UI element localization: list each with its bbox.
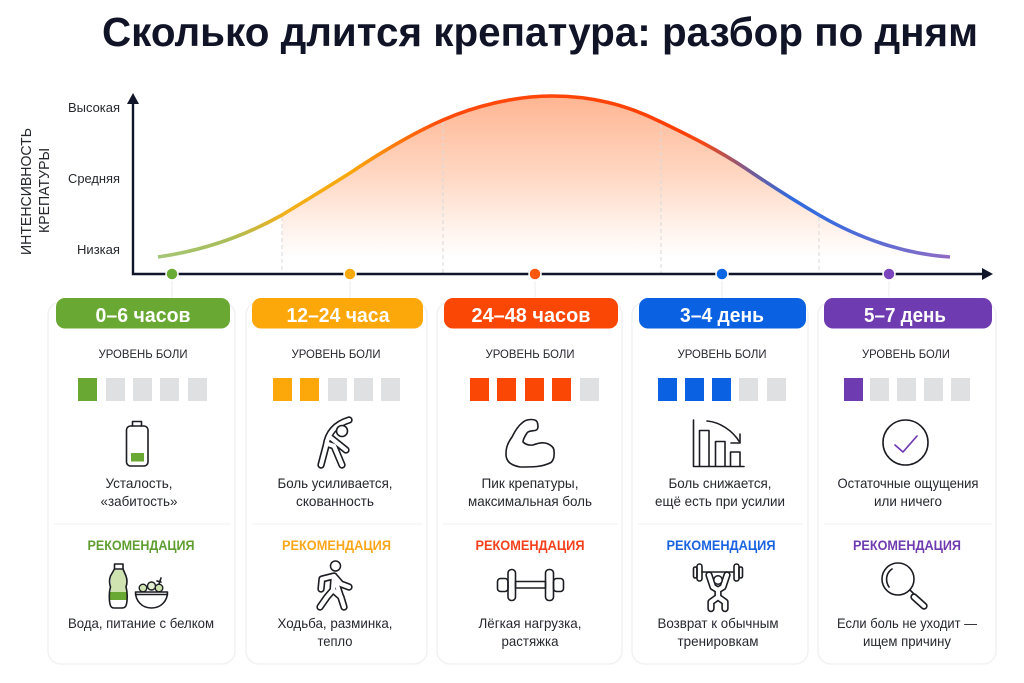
- icon: magnifying glass: [882, 563, 924, 606]
- header: [824, 298, 992, 328]
- title: Сколько длится крепатура: разбор по дням: [102, 9, 978, 55]
- recommendation text: ищем причину: [863, 634, 951, 649]
- icon: check mark in circle: [883, 420, 928, 465]
- icon: low battery: [126, 422, 148, 466]
- panel: 12–24 hours: [246, 298, 427, 664]
- recommendation heading: РЕКОМЕНДАЦИЯ: [476, 538, 584, 553]
- y axis title: [19, 128, 53, 255]
- symptom text: «забитость»: [100, 494, 178, 509]
- symptom text: Остаточные ощущения: [838, 476, 978, 491]
- symptom text: [468, 476, 592, 509]
- pain level: 4 of 5: [470, 378, 599, 401]
- symptom text: [655, 476, 785, 509]
- recommendation text: Ходьба, разминка,: [278, 616, 392, 631]
- symptom text: Усталость,: [106, 476, 172, 491]
- chart: soreness intensity curve: [19, 93, 993, 298]
- symptom text: [838, 476, 978, 509]
- icon: flexed bicep: [506, 420, 554, 467]
- header: 24–48 часов: [472, 305, 590, 327]
- icon: declining bar chart: [694, 420, 744, 466]
- recommendation text: тренировкам: [678, 634, 758, 649]
- pain level: 3 of 5: [658, 378, 786, 401]
- header: [444, 298, 618, 328]
- recommendation text: Если боль не уходит —: [837, 616, 977, 631]
- header: [252, 298, 423, 328]
- pain level label: УРОВЕНЬ БОЛИ: [678, 347, 766, 361]
- recommendation heading: РЕКОМЕНДАЦИЯ: [282, 538, 391, 553]
- recommendation text: [658, 616, 778, 649]
- header: 0–6 часов: [96, 305, 190, 327]
- recommendation heading: РЕКОМЕНДАЦИЯ: [853, 538, 961, 553]
- pain level label: УРОВЕНЬ БОЛИ: [862, 347, 950, 361]
- recommendation heading: РЕКОМЕНДАЦИЯ: [88, 538, 194, 553]
- symptom text: или ничего: [874, 494, 942, 509]
- pain level: 1 of 5: [78, 378, 207, 401]
- recommendation text: [278, 616, 392, 649]
- pain level label: УРОВЕНЬ БОЛИ: [486, 347, 574, 361]
- recommendation text: Вода, питание с белком: [68, 616, 214, 631]
- y axis level labels: Низкая: [77, 242, 120, 257]
- header: [56, 298, 230, 328]
- pain level label: УРОВЕНЬ БОЛИ: [98, 347, 188, 361]
- pain level label: УРОВЕНЬ БОЛИ: [292, 347, 380, 361]
- y axis level labels: Высокая: [68, 100, 120, 115]
- symptom text: скованность: [296, 494, 374, 509]
- panel: 3–4 days: [632, 298, 808, 664]
- recommendation text: тепло: [318, 634, 352, 649]
- symptom text: Боль усиливается,: [278, 476, 392, 491]
- panel: 24–48 hours: [437, 298, 622, 664]
- header: 12–24 часа: [286, 305, 390, 327]
- header: 3–4 день: [680, 305, 764, 327]
- area under curve: [282, 96, 950, 274]
- panel: 5–7 days: [818, 298, 996, 664]
- symptom text: [278, 476, 392, 509]
- pain level: 2 of 5: [273, 378, 400, 401]
- y axis level labels: Средняя: [68, 171, 120, 186]
- header: 5–7 день: [864, 305, 946, 327]
- recommendation text: растяжка: [502, 634, 559, 649]
- panel: 0–6 hours: [48, 298, 235, 664]
- y axis title: КРЕПАТУРЫ: [37, 148, 53, 233]
- icon: dumbbell: [498, 570, 564, 600]
- intensity curve line: [158, 96, 950, 257]
- header: [639, 298, 806, 328]
- recommendation text: [478, 616, 582, 649]
- timeline markers: [166, 268, 895, 298]
- icon: side stretch figure: [321, 420, 349, 465]
- icon: walking person: [320, 561, 349, 607]
- axes with arrows: [127, 93, 993, 280]
- recommendation text: Возврат к обычным: [658, 616, 778, 631]
- symptom text: [100, 476, 178, 509]
- icon: weightlifter: [694, 564, 742, 608]
- y axis level labels: [68, 100, 120, 257]
- recommendation heading: РЕКОМЕНДАЦИЯ: [666, 538, 776, 553]
- symptom text: Боль снижается,: [668, 476, 772, 491]
- icon: bottle and salad bowl: [109, 564, 168, 608]
- pain level: 1 of 5: [844, 378, 970, 401]
- symptom text: Пик крепатуры,: [482, 476, 578, 491]
- recommendation text: [837, 616, 977, 649]
- symptom text: максимальная боль: [468, 494, 592, 509]
- symptom text: ещё есть при усилии: [655, 494, 785, 509]
- recommendation text: Лёгкая нагрузка,: [478, 616, 582, 631]
- y axis title: ИНТЕНСИВНОСТЬ: [19, 128, 35, 255]
